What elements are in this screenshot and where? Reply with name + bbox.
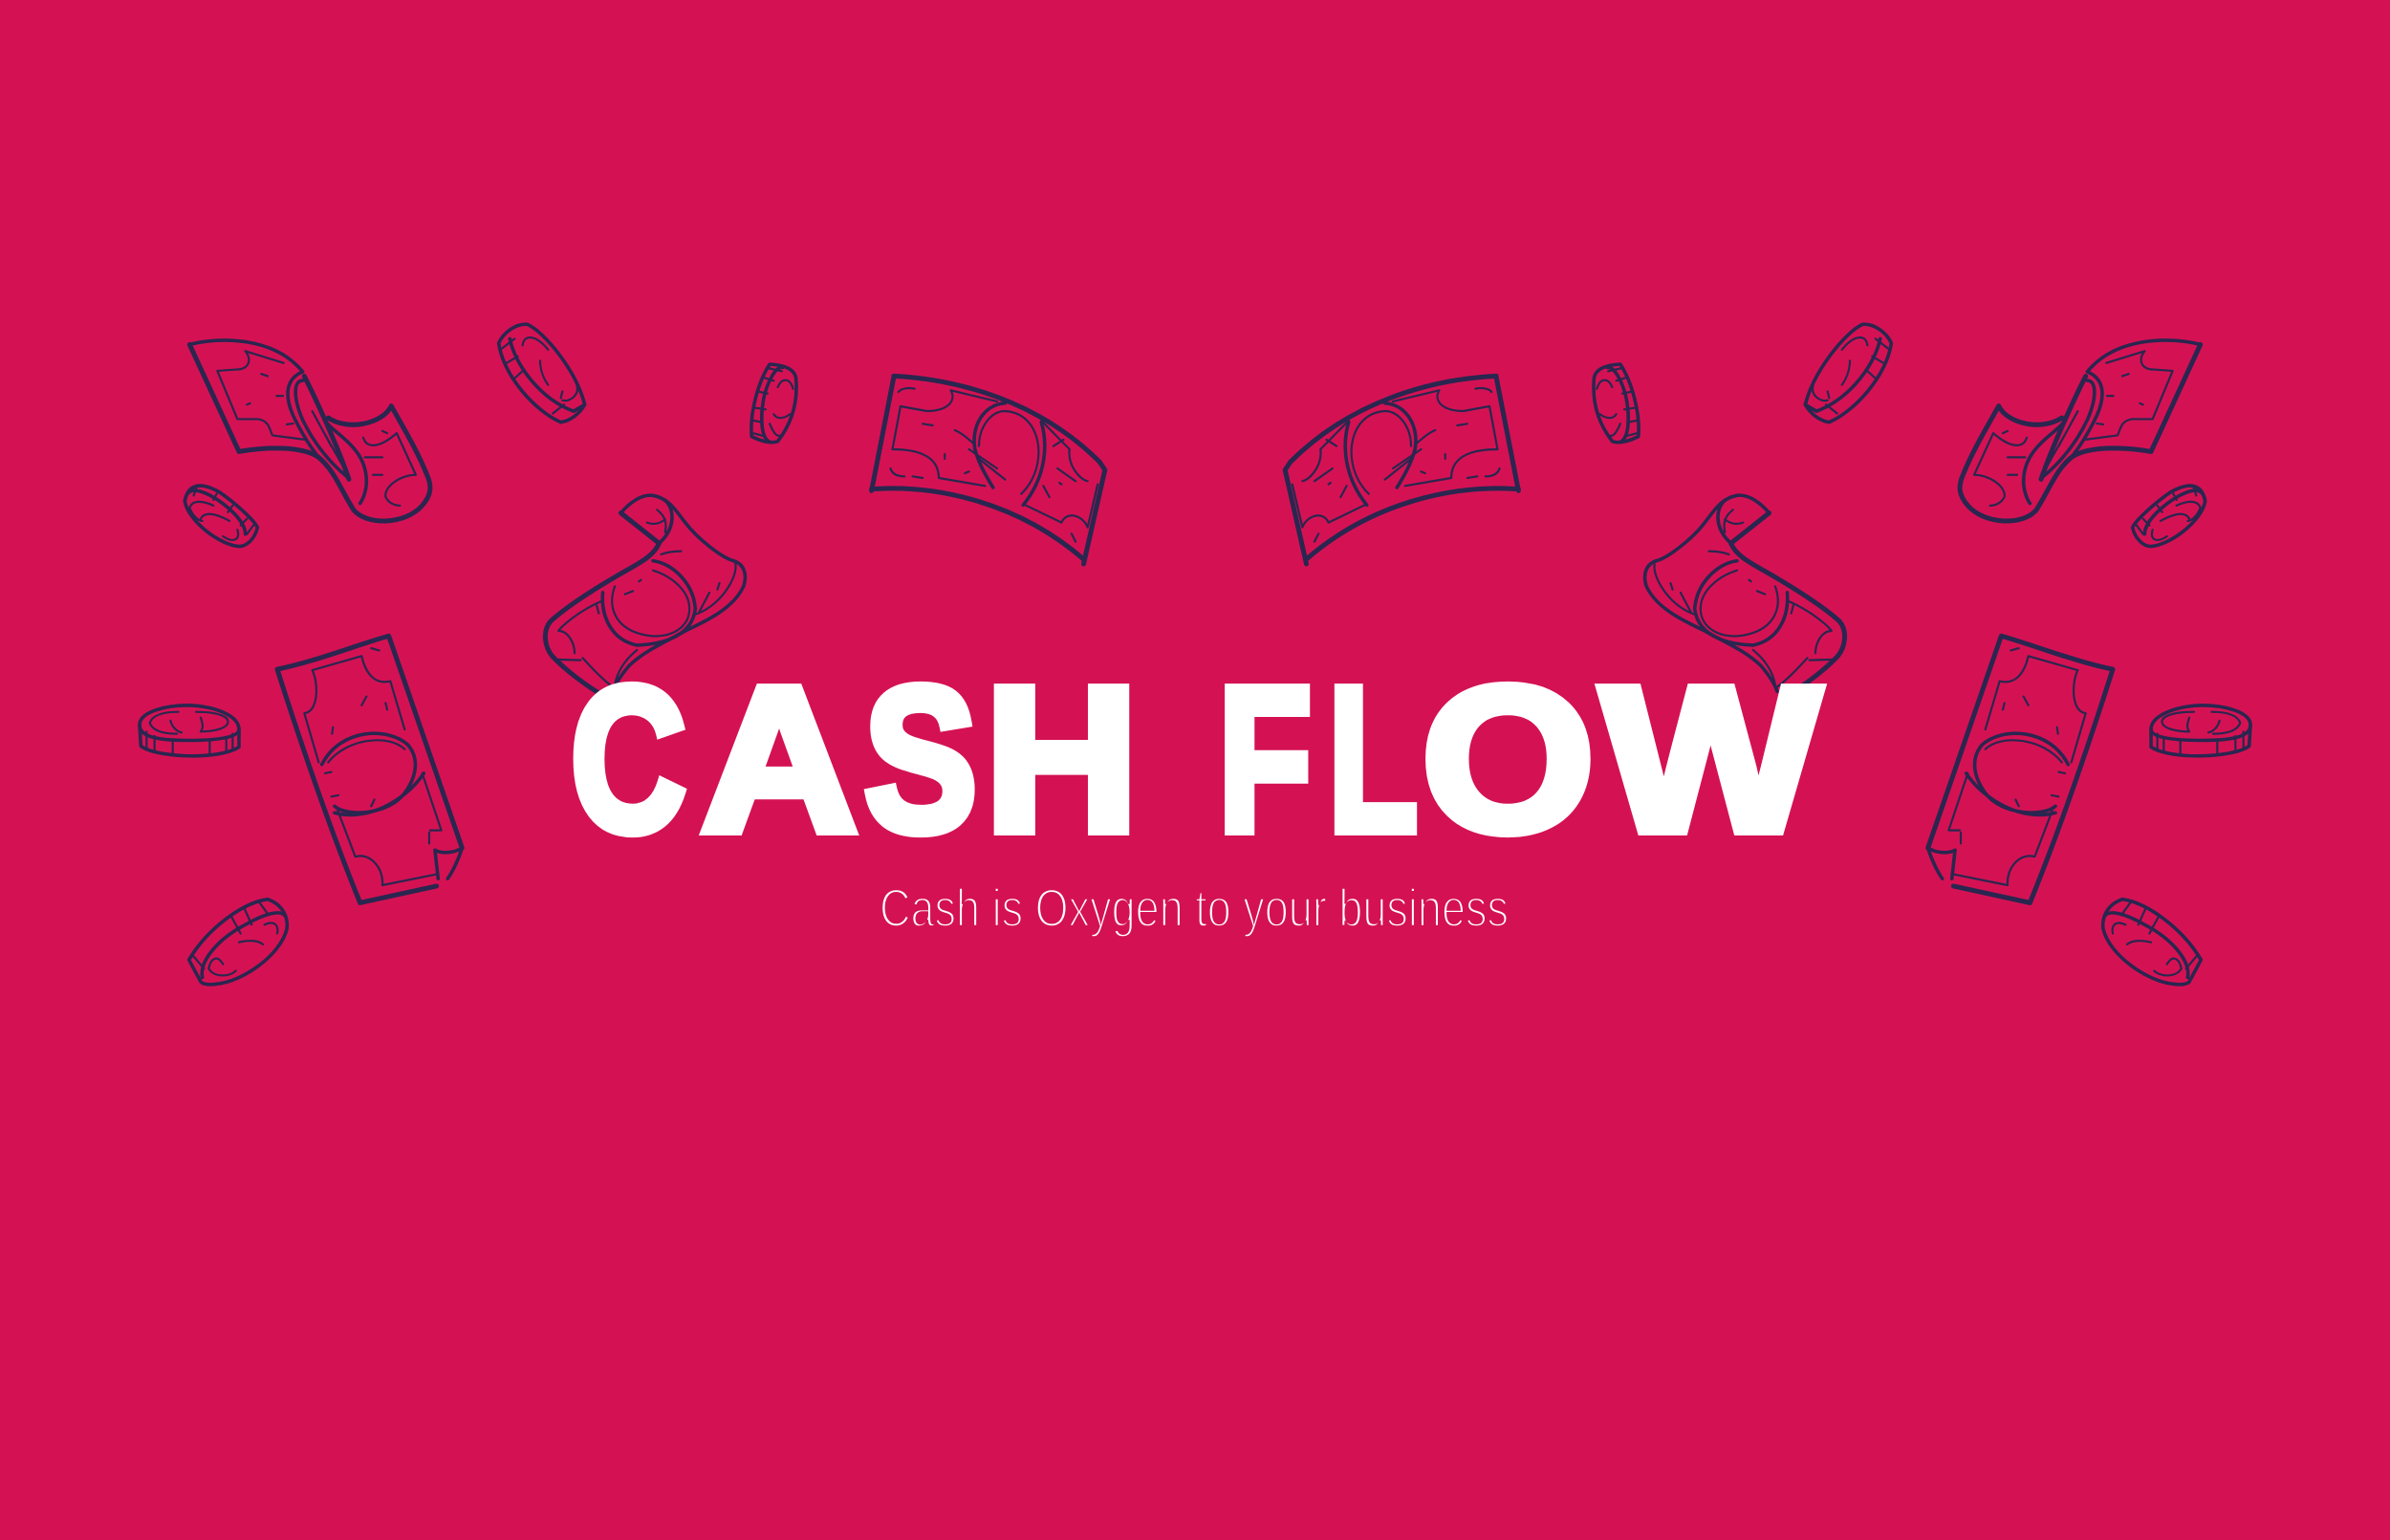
icon: small coin, upper right: [2133, 486, 2205, 547]
subtitle: Cash is Oxygen to your business: [880, 878, 1509, 938]
title: F: [1218, 644, 1312, 874]
title: S: [864, 644, 977, 874]
icon: waving bill, upper left: [189, 340, 430, 521]
icon: waving bill, upper right: [1960, 340, 2201, 521]
icon: rolled bill, centre left: [545, 495, 745, 698]
icon: small coin, upper left: [185, 486, 257, 547]
title: A: [702, 644, 857, 874]
icon: tilted coin, top right: [1805, 324, 1891, 423]
title: L: [1329, 644, 1418, 874]
title: O: [1423, 644, 1595, 874]
title: C: [571, 644, 686, 874]
icon: large bill, left: [277, 636, 462, 902]
icon: coin, lower right: [2103, 900, 2201, 985]
icon: tilted coin, top left: [499, 324, 585, 423]
title: W: [1602, 644, 1820, 874]
icon: flat coin, right: [2151, 705, 2250, 756]
title: H: [985, 644, 1138, 874]
icon: flat coin, left: [140, 705, 239, 756]
icon: coin, lower left: [189, 900, 287, 985]
icon: narrow coin, centre left: [751, 364, 796, 443]
icon: curved bill, centre right: [1285, 376, 1518, 564]
icon: curved bill, centre left: [872, 376, 1105, 564]
icon: rolled bill, centre right: [1645, 495, 1845, 698]
icon: narrow coin, centre right: [1594, 364, 1639, 443]
icon: large bill, right: [1928, 636, 2113, 902]
